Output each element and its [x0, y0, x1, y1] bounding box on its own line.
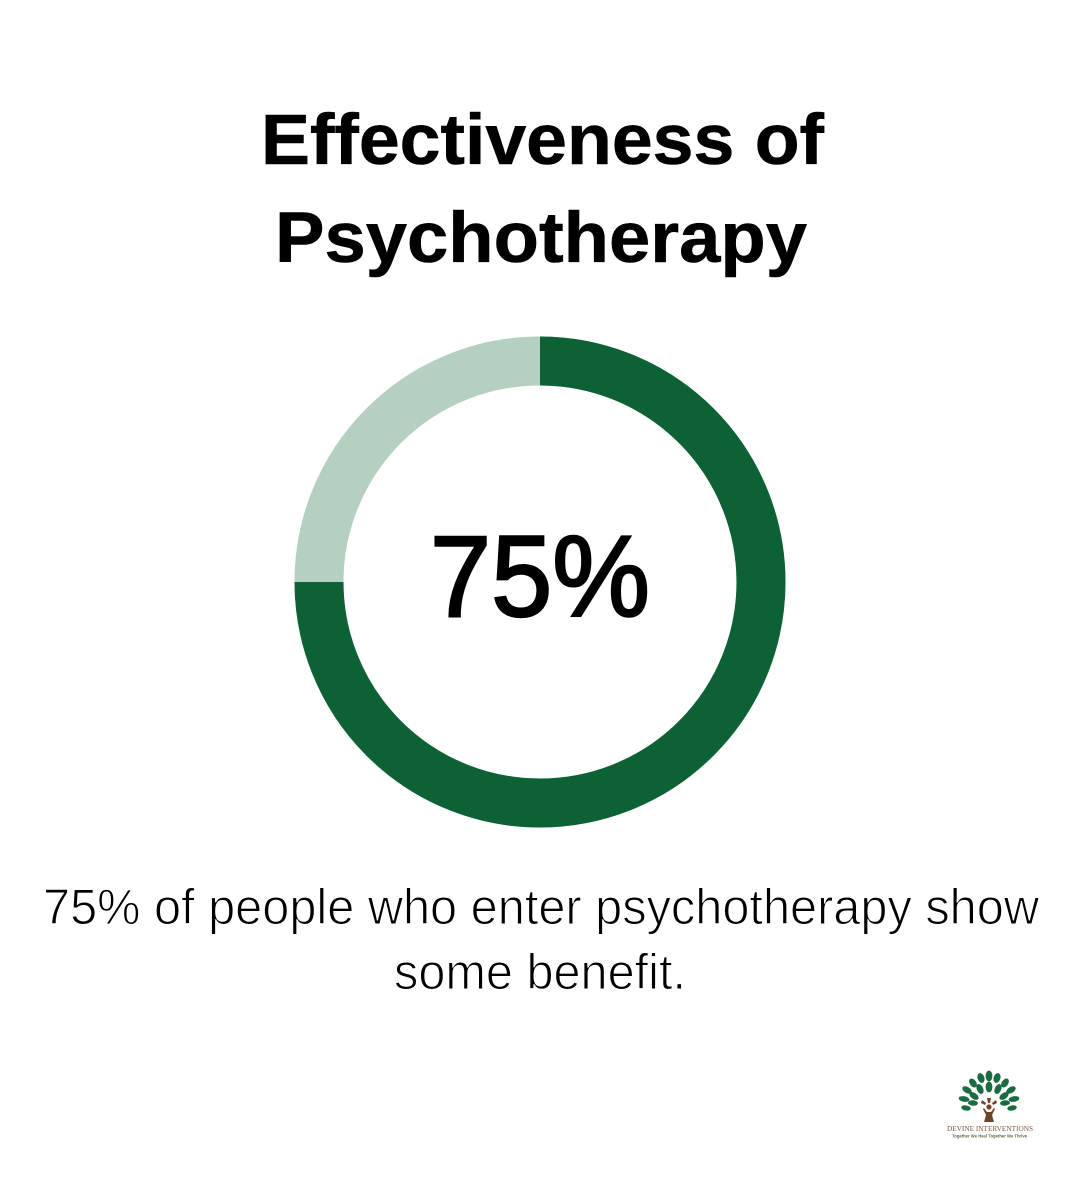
caption	[43, 879, 1040, 1000]
title: Psychotherapy	[275, 199, 808, 278]
logo: Devine Interventions	[947, 1071, 1033, 1138]
logo tagline: Together We Heal Together We Thrive	[952, 1134, 1027, 1138]
caption: some benefit.	[394, 944, 686, 1000]
logo name: DEVINE INTERVENTIONS	[947, 1125, 1033, 1133]
icon: tree	[959, 1071, 1019, 1122]
title: Effectiveness of	[261, 101, 824, 180]
donut chart: 75 percent	[319, 361, 761, 803]
caption: 75% of people who enter psychotherapy show	[43, 879, 1040, 935]
title	[261, 101, 824, 278]
donut centre value: 75%	[430, 513, 650, 641]
